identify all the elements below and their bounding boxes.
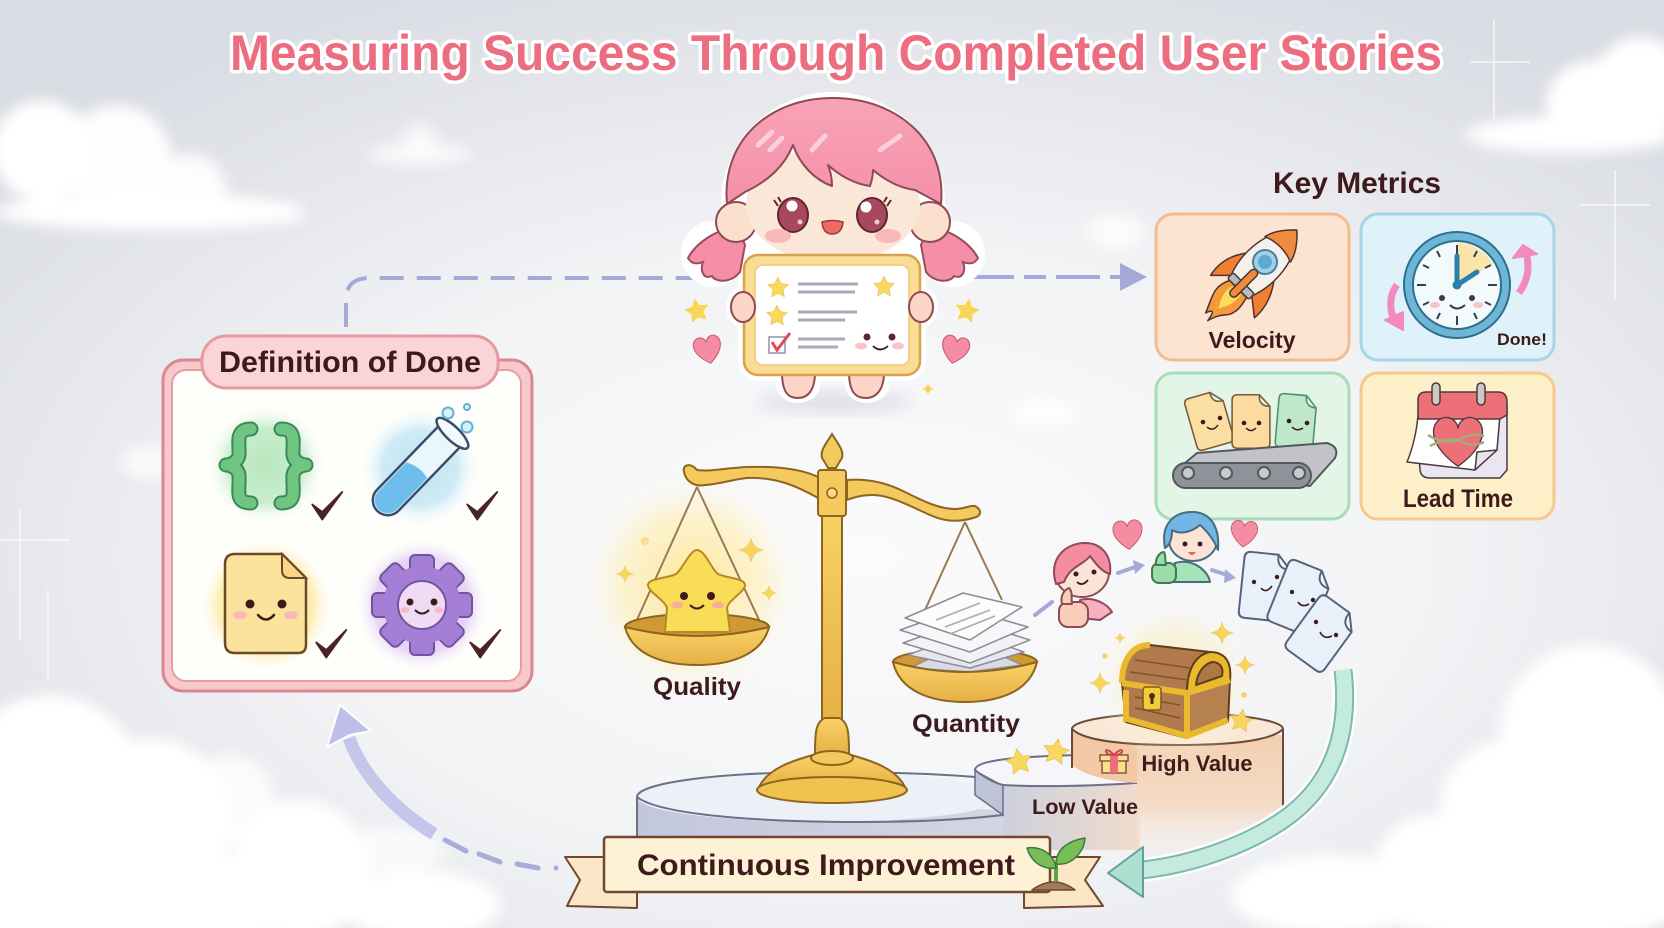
hair xyxy=(727,98,941,204)
icon: rocket xyxy=(1186,209,1320,343)
high value step xyxy=(1072,713,1283,860)
icon: rotation arrows xyxy=(1385,245,1537,330)
icon: check xyxy=(316,630,346,658)
icon: clock xyxy=(1404,232,1510,338)
heading pill xyxy=(202,336,498,388)
stars and hearts xyxy=(682,296,982,324)
post xyxy=(822,510,842,725)
sparkles xyxy=(616,538,776,600)
legs xyxy=(782,372,815,398)
left pan front xyxy=(625,627,769,665)
label: high value: High Value xyxy=(1142,751,1252,776)
icon: gear xyxy=(354,537,490,673)
heading: key metrics: Key Metrics xyxy=(1273,167,1441,200)
icon: check xyxy=(470,630,500,658)
finial and pivot xyxy=(822,434,842,468)
card: velocity xyxy=(1156,209,1349,360)
checklist board xyxy=(744,255,920,375)
icon: sprout xyxy=(1027,838,1085,890)
icon: smiling star xyxy=(648,550,745,632)
icon: test tube xyxy=(358,404,482,530)
beam xyxy=(684,465,980,521)
card: velocity: Velocity xyxy=(1208,327,1296,353)
icon: check xyxy=(467,492,497,520)
face xyxy=(746,147,920,263)
icon: smiling document xyxy=(198,537,334,673)
right pan front xyxy=(893,662,1037,702)
arrow: stories back to continuous improvement xyxy=(1108,670,1345,897)
low value step xyxy=(975,755,1140,850)
sparkles xyxy=(1090,622,1254,733)
foot xyxy=(815,718,849,755)
card: lead time: Lead Time xyxy=(1403,485,1513,513)
ears xyxy=(716,202,756,242)
panel: definition of done xyxy=(163,336,532,691)
strings xyxy=(636,487,1002,622)
arrow: character to key metrics xyxy=(970,263,1147,291)
title: Measuring Success Through Completed User Stories xyxy=(230,25,1442,81)
icon: calendar with heart xyxy=(1407,383,1507,478)
icon: treasure chest xyxy=(1090,595,1260,765)
label: low value: Low Value xyxy=(1032,795,1138,819)
icon: check xyxy=(312,492,342,520)
banner: continuous improvement xyxy=(565,837,1103,908)
card: conveyor of stories xyxy=(1156,373,1349,519)
arrow: character to definition of done xyxy=(346,278,695,327)
arrows xyxy=(1035,566,1230,615)
icon: paper stack xyxy=(900,593,1030,672)
stepped pedestal xyxy=(637,713,1283,860)
base pedestal xyxy=(637,772,1003,850)
icon: gift xyxy=(1100,750,1128,773)
icon: code braces xyxy=(204,403,328,527)
icon: completed story documents xyxy=(1238,551,1360,674)
icon: pink user with thumbs up xyxy=(1054,543,1112,627)
pigtails xyxy=(688,228,745,281)
heading pill: Definition of Done xyxy=(219,346,481,379)
icon: story documents xyxy=(1184,390,1317,451)
cheeks xyxy=(765,229,791,243)
shadow xyxy=(757,393,913,411)
character holding checklist xyxy=(682,98,982,411)
icon: conveyor belt xyxy=(1173,443,1336,488)
mouth xyxy=(822,220,843,234)
right pan back xyxy=(893,649,1037,675)
left pan back xyxy=(625,614,769,640)
icon: blue user with thumbs up xyxy=(1152,512,1218,583)
eyes xyxy=(778,198,808,232)
card: clock: Done! xyxy=(1497,330,1547,349)
glow xyxy=(574,467,810,703)
label: quantity: Quantity xyxy=(912,710,1020,738)
label: quality: Quality xyxy=(653,673,741,701)
user feedback flow xyxy=(1035,512,1360,674)
card: clock xyxy=(1361,214,1554,360)
card: lead time xyxy=(1361,373,1554,519)
arrow: continuous improvement to definition of done xyxy=(327,705,558,870)
icon: stars xyxy=(1004,736,1071,775)
balance scale xyxy=(574,434,1037,803)
sticker outline xyxy=(687,98,979,397)
hearts xyxy=(1112,519,1144,551)
banner: continuous improvement: Continuous Improvement xyxy=(637,849,1015,882)
hands xyxy=(731,292,755,322)
